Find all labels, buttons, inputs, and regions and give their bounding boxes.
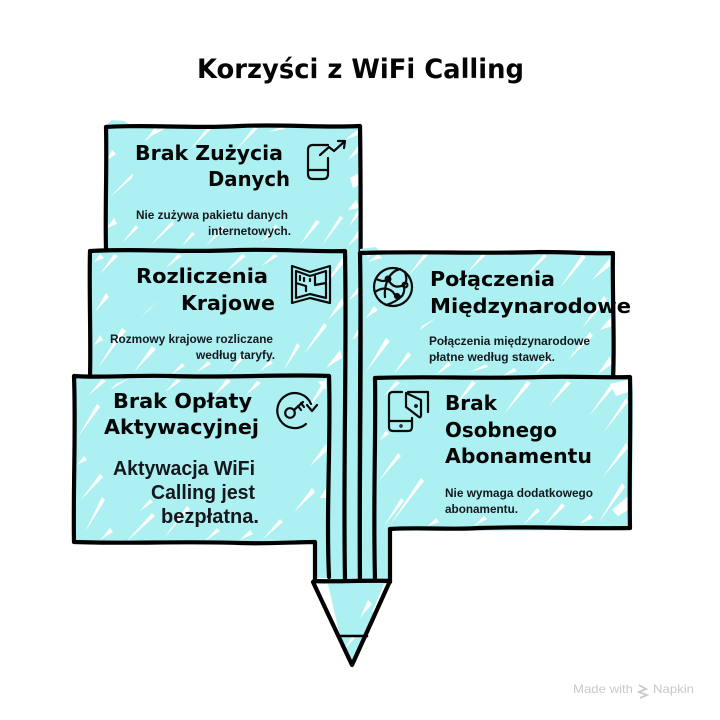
description: płatne według stawek. [429,350,555,364]
heading: Osobnego [445,418,557,442]
pencil tip [313,581,391,665]
description [445,486,593,516]
icon: key with rotating arrow [277,393,317,428]
heading [136,264,275,315]
description: Aktywacja WiFi [113,458,255,480]
heading: Międzynarodowe [430,294,631,318]
footer: Made with Napkin [573,682,694,698]
icon: phone with rising arrow [308,141,345,179]
panel: Rozliczenia Krajowe [89,250,346,582]
icon: globe network [374,268,412,306]
description: Nie zużywa pakietu danych [136,208,288,222]
description: Rozmowy krajowe rozliczane [110,332,273,346]
description: Nie wymaga dodatkowego [445,486,593,500]
footer: Made with Napkin: Napkin [653,682,694,696]
description [110,332,275,362]
heading: Krajowe [181,291,275,315]
description [113,458,259,528]
heading: Brak Opłaty [113,389,252,413]
heading: Abonamentu [445,444,592,468]
icon: phone with door [389,392,428,431]
heading: Rozliczenia [136,264,268,288]
panel: Połączenia Międzynarodowe [360,247,631,582]
heading: Brak [445,391,498,415]
heading: Danych [208,167,290,191]
description [136,208,291,238]
footer: Made with Napkin: Made with [573,682,633,696]
heading: Połączenia [430,267,555,291]
description: według taryfy. [195,348,275,362]
description: bezpłatna. [161,506,259,528]
heading: Brak Zużycia [135,141,283,165]
panel: Brak Opłaty Aktywacyjnej [73,375,329,582]
title: Korzyści z WiFi Calling [197,54,524,85]
description: abonamentu. [445,502,518,516]
heading [104,389,259,439]
panel: Brak Zużycia Danych [105,120,363,582]
heading [135,141,290,191]
description: Połączenia międzynarodowe [429,334,590,348]
icon: folded map [292,266,330,303]
description: internetowych. [208,224,291,238]
description: Calling jest [151,482,255,504]
heading [430,267,631,318]
description [429,334,590,364]
heading [445,391,592,468]
heading: Aktywacyjnej [104,415,259,439]
panel: Brak Osobnego Abonamentu [374,376,633,582]
